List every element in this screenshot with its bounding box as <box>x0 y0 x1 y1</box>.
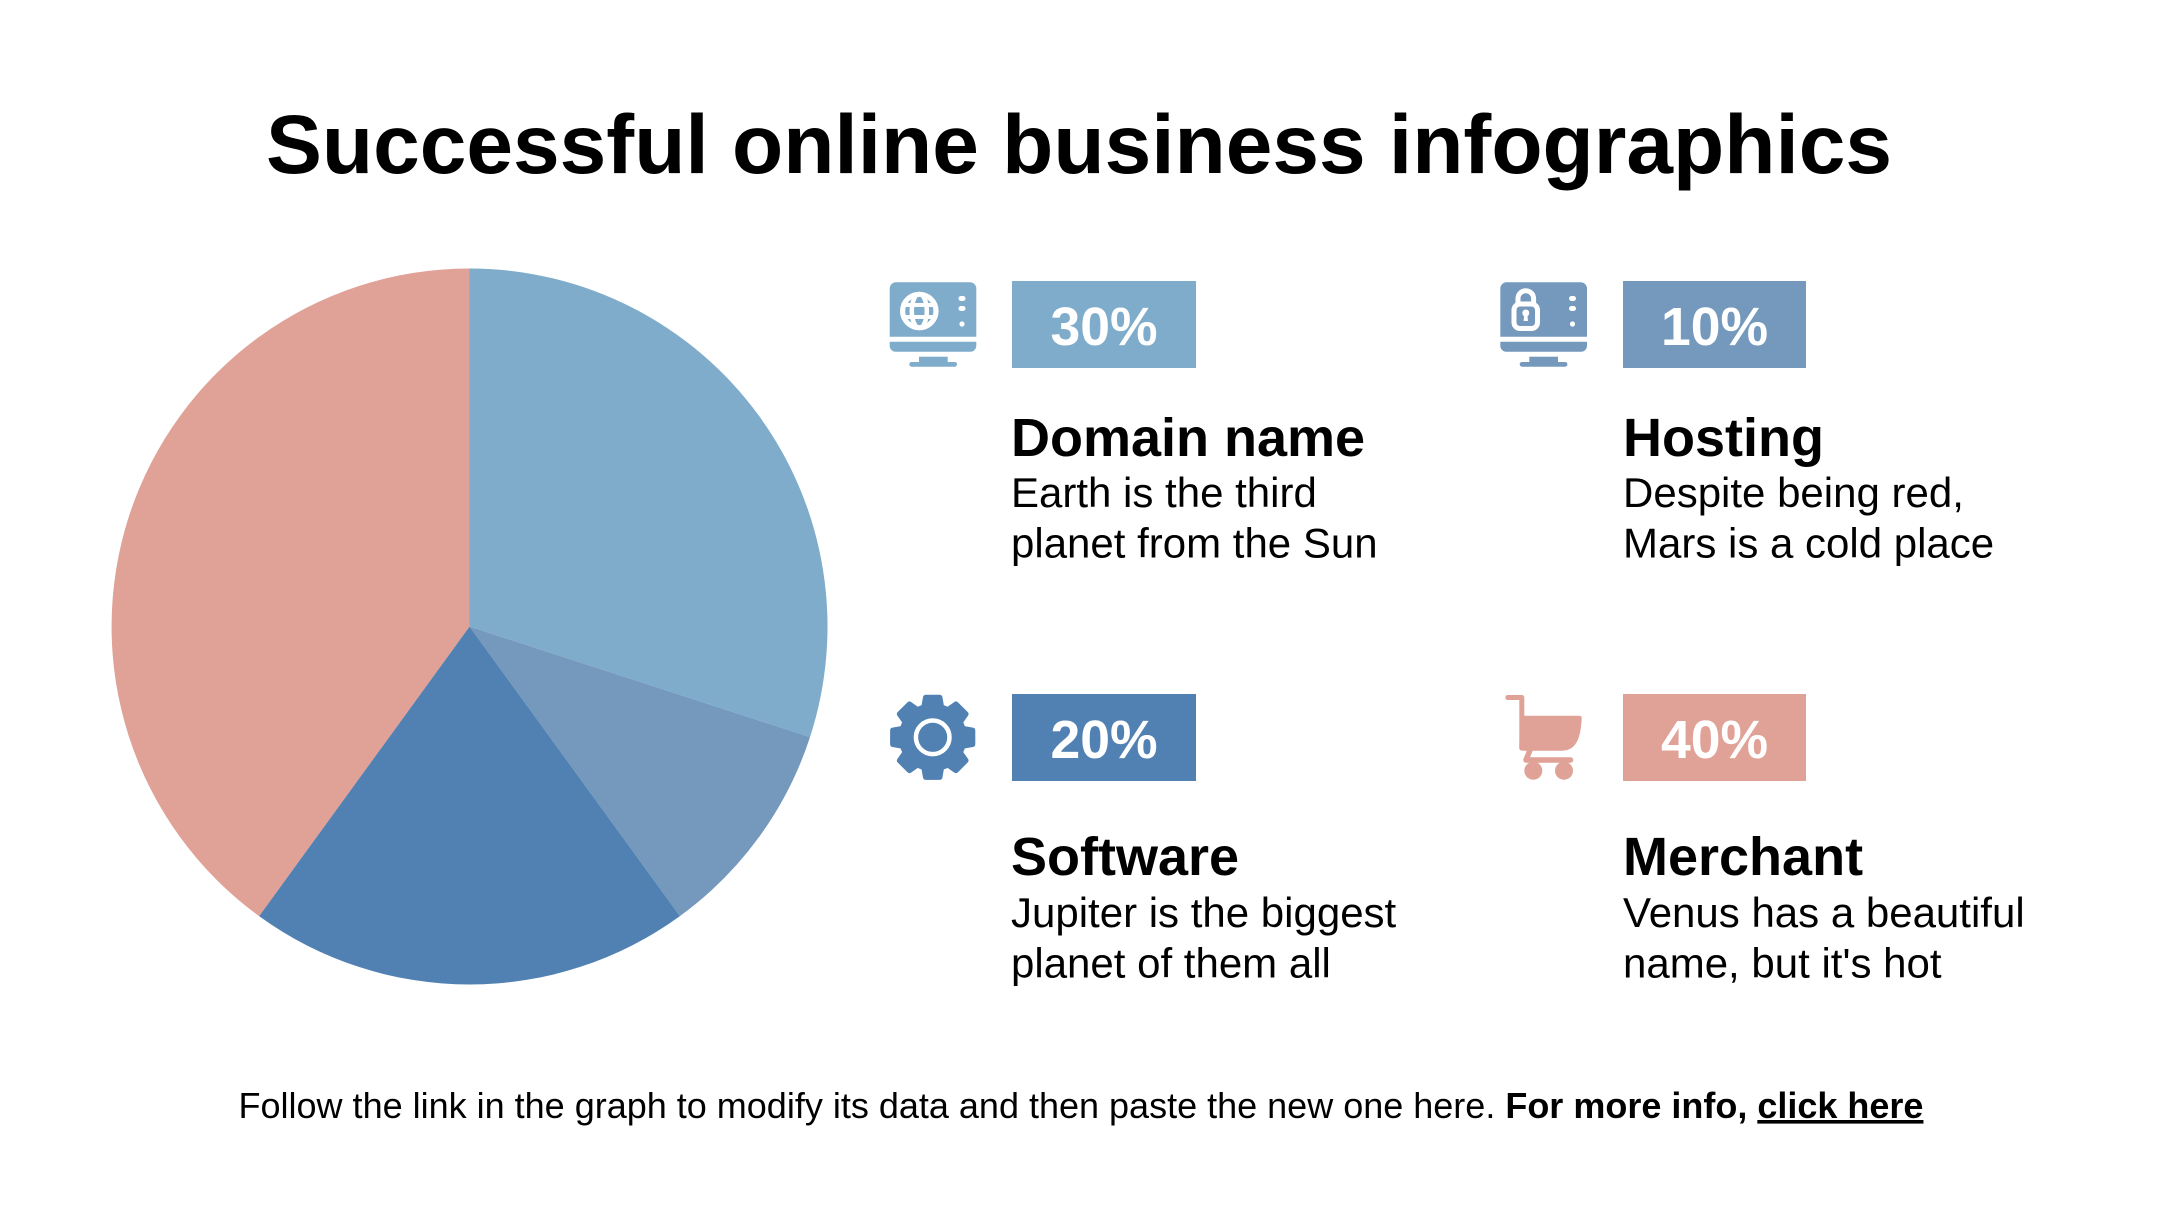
pie chart <box>112 268 828 984</box>
text: software description: Jupiter is the biggest <box>1011 889 1396 936</box>
badge: 20% <box>1012 694 1196 781</box>
text: merchant description: Venus has a beautiful <box>1623 889 2025 936</box>
heading: software: Software <box>1011 827 1239 887</box>
text: domain name description: planet from the Sun <box>1011 520 1378 566</box>
text: hosting description: Mars is a cold place <box>1623 520 1994 566</box>
title: Successful online business infographics <box>266 97 1892 191</box>
icon: monitor with lock <box>1500 282 1587 367</box>
badge: 10%: 10% <box>1661 298 1768 357</box>
heading: domain name: Domain name <box>1011 408 1365 468</box>
badge: 20%: 20% <box>1050 711 1158 770</box>
panel: merchant <box>1508 694 2025 986</box>
icon: gear <box>890 695 975 780</box>
text: software description: planet of them all <box>1011 940 1331 986</box>
icon: monitor with globe <box>890 282 976 367</box>
panel: hosting <box>1500 281 1994 566</box>
badge: 30%: 30% <box>1050 298 1158 357</box>
badge: 40% <box>1623 694 1806 781</box>
heading: merchant: Merchant <box>1623 827 1863 887</box>
badge: 40%: 40% <box>1661 711 1768 770</box>
text: hosting description: Despite being red, <box>1623 469 1964 516</box>
text: domain name description: Earth is the third <box>1011 469 1317 516</box>
icon: shopping cart <box>1508 698 1582 780</box>
text: merchant description: name, but it's hot <box>1623 940 1942 986</box>
heading: hosting: Hosting <box>1623 408 1824 468</box>
panel: domain name <box>890 281 1378 566</box>
badge: 10% <box>1623 281 1806 368</box>
footer note: Follow the link in the graph to modify its data and then paste the new one here. For more info, click here <box>239 1085 1923 1126</box>
panel: software <box>890 694 1397 986</box>
badge: 30% <box>1012 281 1196 368</box>
